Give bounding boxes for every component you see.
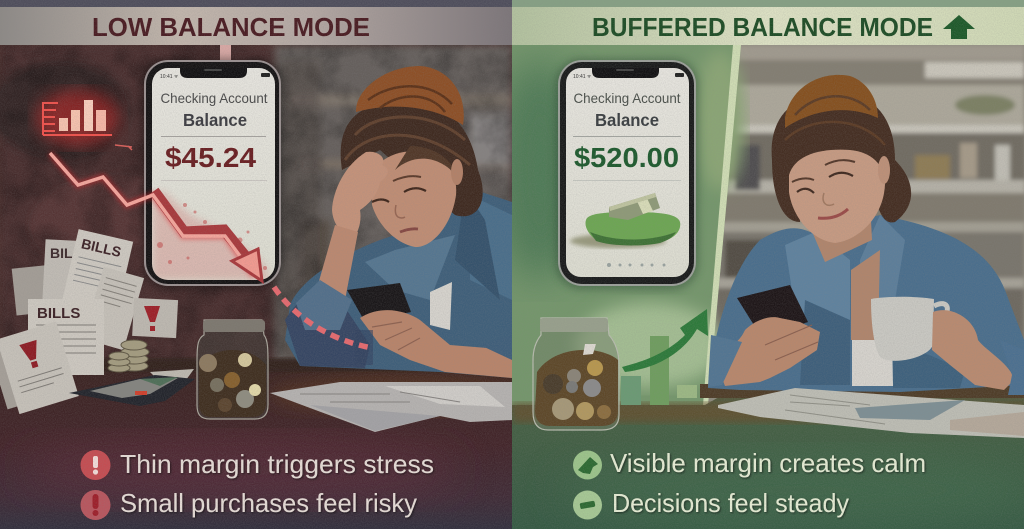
bullet list: buffered balance (573, 448, 926, 520)
bullet list: low balance (80, 449, 434, 520)
illustration: calm woman (708, 75, 1024, 395)
bill sheets back: BILLS (37, 305, 80, 322)
text: checking account label: Checking Account (574, 90, 681, 106)
blurred shelf background (0, 45, 512, 365)
phone: checking balance $45.24: 10:41 ᯤ (160, 74, 179, 80)
panel: buffered balance mode (490, 0, 1024, 529)
text: balance amount: $45.24 (165, 142, 256, 173)
papers on table (270, 382, 512, 432)
shirt (708, 215, 1024, 392)
shirt body (285, 190, 512, 378)
bullet: decisions feel steady: Decisions feel steady (612, 488, 849, 518)
heading: buffered balance mode: BUFFERED BALANCE MODE (592, 12, 933, 42)
bullet: small purchases feel risky: Small purchases feel risky (120, 488, 417, 518)
header band (512, 7, 1024, 45)
panel: low balance mode (0, 0, 530, 529)
bill with warning (0, 321, 79, 417)
green side panel (490, 45, 745, 405)
text: balance label: Balance (183, 110, 247, 130)
hair bun (356, 66, 464, 125)
phone in hand (347, 283, 411, 317)
bullet: thin margin triggers stress: Thin margin triggers stress (120, 449, 434, 479)
heading: low balance mode: LOW BALANCE MODE (92, 12, 370, 42)
hair back (772, 92, 911, 222)
neck (805, 200, 872, 262)
icon: coin stacks (108, 340, 149, 372)
icon: coin jar full (533, 318, 619, 430)
bill sheets back (12, 229, 178, 375)
icon: coin jar (197, 320, 268, 419)
text: checking account label: Checking Account (160, 90, 268, 106)
text: balance amount: $520.00 (574, 142, 679, 173)
phone in hand (737, 285, 808, 338)
cup (871, 297, 934, 361)
hand on forehead (332, 152, 384, 232)
illustration: stressed woman (285, 66, 512, 378)
table (0, 362, 512, 529)
bill sheets back: BILLS (80, 235, 123, 260)
papers on table (718, 388, 1024, 438)
icon: cash on pillow (570, 193, 680, 267)
face (789, 150, 885, 243)
icon: calculator (69, 369, 195, 406)
hand holding phone and arm (714, 317, 820, 386)
header band (0, 7, 512, 60)
blurred kitchen shelves (716, 45, 1024, 348)
arrow: falling balance trend (50, 153, 262, 281)
bill sheets back: BIL (50, 245, 73, 261)
phone: checking balance $45.24 (141, 58, 284, 290)
table (512, 385, 1024, 529)
chart: growing bars with arrow (621, 309, 708, 405)
phone: checking balance $520.00 (555, 58, 699, 290)
hand on cup and arm (932, 310, 1014, 390)
arrow: dashed decline (274, 287, 372, 348)
hand holding phone (360, 310, 512, 378)
face (372, 151, 456, 247)
icon: bills pile (0, 229, 178, 417)
icon: glowing bar chart (36, 90, 132, 150)
bullet: visible margin creates calm: Visible margin creates calm (610, 448, 926, 478)
phone: checking balance $520.00: 10:41 ᯤ (573, 74, 592, 80)
icon: up arrow (943, 15, 975, 39)
hair back (341, 100, 483, 216)
text: balance label: Balance (595, 110, 659, 130)
